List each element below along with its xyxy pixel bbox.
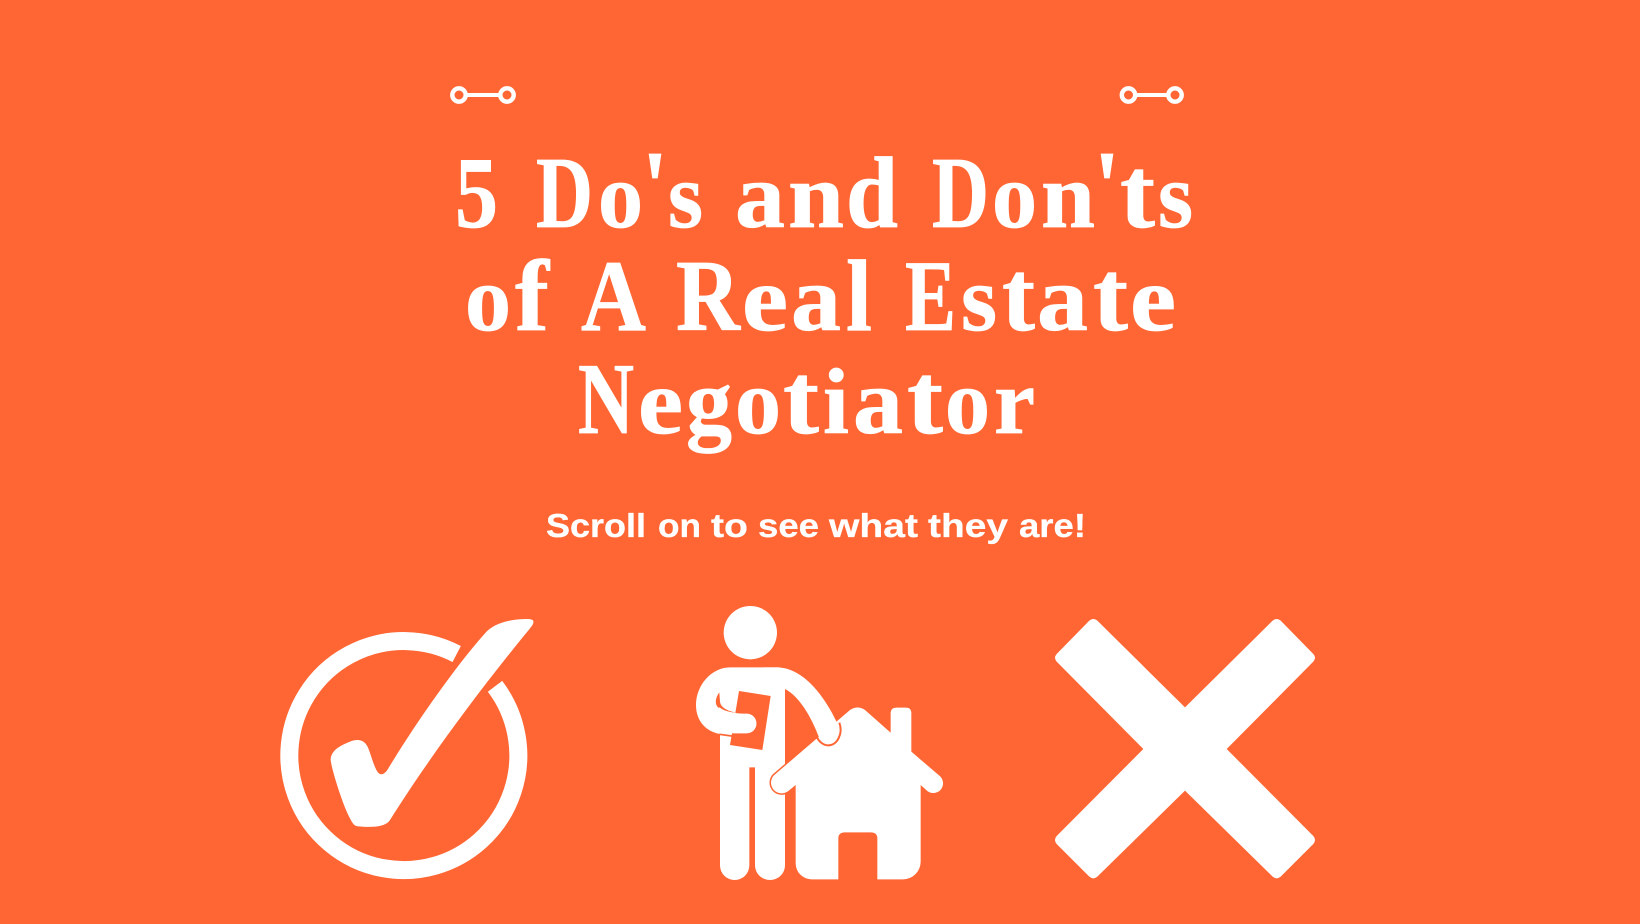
title: t	[907, 343, 943, 456]
title: t	[1002, 240, 1035, 353]
title: o	[465, 248, 511, 351]
title: n	[788, 145, 844, 248]
subtitle: on	[658, 507, 701, 544]
title: e	[1130, 248, 1176, 351]
title: a	[735, 145, 785, 248]
title: o	[735, 351, 781, 454]
title: t	[1120, 137, 1155, 250]
subtitle: to	[711, 507, 748, 544]
subtitle: Scroll	[546, 507, 646, 544]
title: s	[1158, 145, 1193, 248]
title: a	[853, 351, 903, 454]
title: a	[791, 248, 841, 351]
title: f	[515, 240, 550, 353]
title: e	[742, 248, 788, 351]
title: s	[961, 248, 997, 351]
subtitle: they	[928, 507, 1009, 544]
title: '	[642, 131, 668, 244]
title: d	[846, 137, 898, 250]
title: o	[992, 145, 1037, 248]
icon: check mark in circle	[289, 619, 533, 870]
title: 5	[455, 137, 498, 250]
title: n	[1041, 145, 1095, 248]
title: '	[1094, 131, 1120, 244]
title: E	[905, 240, 956, 353]
title: l	[846, 240, 872, 353]
title: A	[581, 240, 645, 353]
title: D	[536, 137, 593, 250]
title: g	[686, 351, 732, 454]
title: D	[932, 137, 989, 250]
title: o	[945, 351, 990, 454]
title: t	[783, 343, 819, 456]
icon: cross mark	[1055, 619, 1315, 878]
title: i	[823, 351, 849, 454]
icon: left connector ornament	[452, 88, 514, 102]
title	[455, 131, 1193, 456]
subtitle: what	[828, 507, 918, 544]
icon: right connector ornament	[1122, 88, 1182, 102]
title: N	[578, 343, 634, 456]
title: o	[598, 145, 643, 248]
subtitle: see	[758, 507, 819, 544]
title: e	[638, 351, 683, 454]
title: r	[994, 351, 1035, 454]
title: s	[668, 145, 703, 248]
icon: agent with clipboard beside a house	[696, 606, 943, 880]
title: a	[1037, 248, 1088, 351]
title: R	[676, 240, 741, 353]
subtitle: are!	[1019, 507, 1086, 544]
title: t	[1093, 240, 1128, 353]
